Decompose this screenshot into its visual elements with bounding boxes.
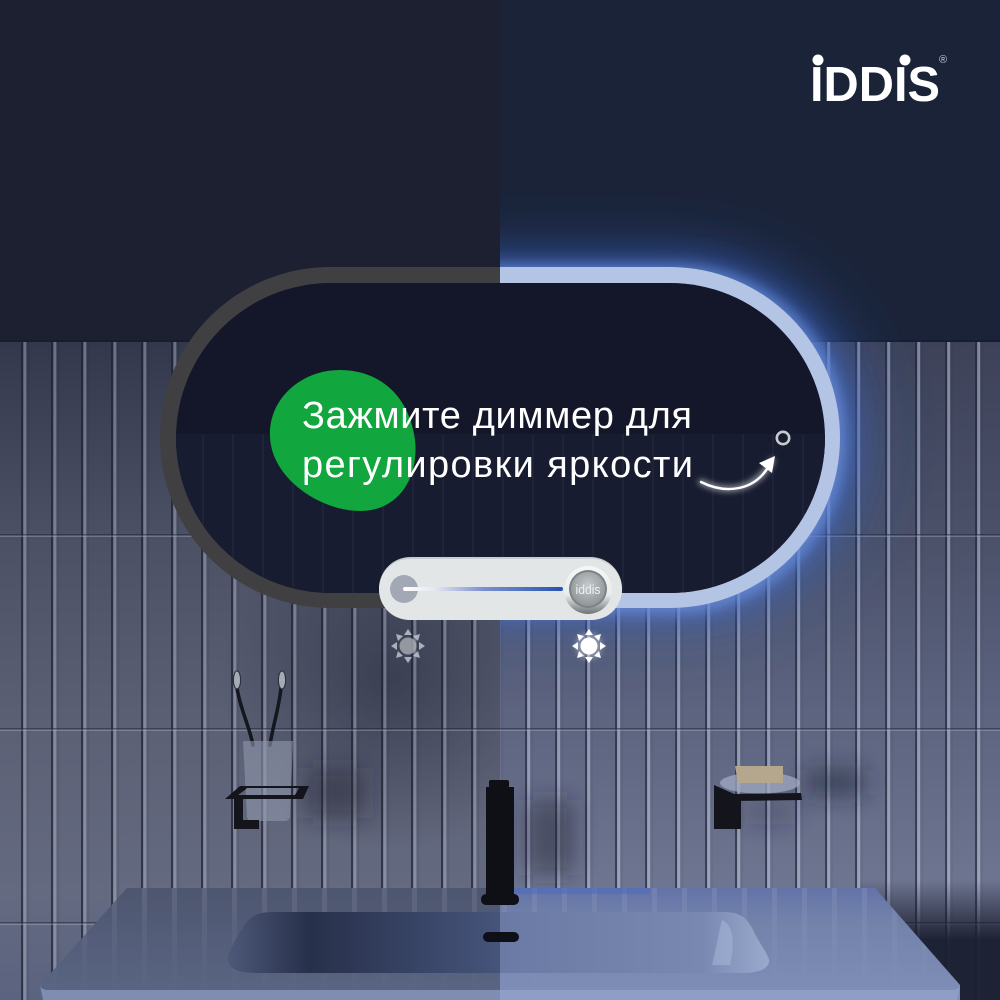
iddis logo: IDDIS [810,58,940,112]
dimmer slider [379,557,622,620]
faucet [481,780,519,905]
basin left [228,912,500,973]
slider start point [390,575,418,603]
background wall: upper dark paint [0,0,1000,342]
target ring [777,432,789,444]
basin highlight [712,920,733,965]
basin right [500,912,769,973]
mirror frame: dimmed left half [160,267,500,608]
slider track [403,587,563,591]
slider knob [564,566,612,614]
mirror glass [176,283,825,593]
counter front lip [40,985,500,1000]
icon: bright sun [572,629,606,663]
green blob [270,370,416,511]
drain [483,932,519,942]
wall shadow behind counter corner [860,880,1000,1000]
soap dish holder [714,766,802,829]
toothbrushes [233,671,286,745]
instruction text: регулировки яркости [302,444,693,486]
glass [243,741,293,821]
registered mark: ® [939,54,947,66]
icon: dim sun [391,629,425,663]
accessory shadows on wall [305,768,865,875]
arrow to dimmer [701,432,789,489]
slider knob: iddis [576,582,601,597]
bracket [714,785,741,829]
vanity counter [40,888,960,1000]
instruction text: Зажмите диммер для [302,395,692,437]
shelf bracket [234,799,259,829]
mirror backlight glow [500,220,892,659]
tiled wall [0,340,1000,1000]
toothbrushes and glass holder [225,671,309,829]
soap [735,766,783,783]
instruction text [302,395,693,486]
glass dish [720,772,800,794]
mirror frame: lit right half [500,267,840,608]
mirror [160,267,840,608]
